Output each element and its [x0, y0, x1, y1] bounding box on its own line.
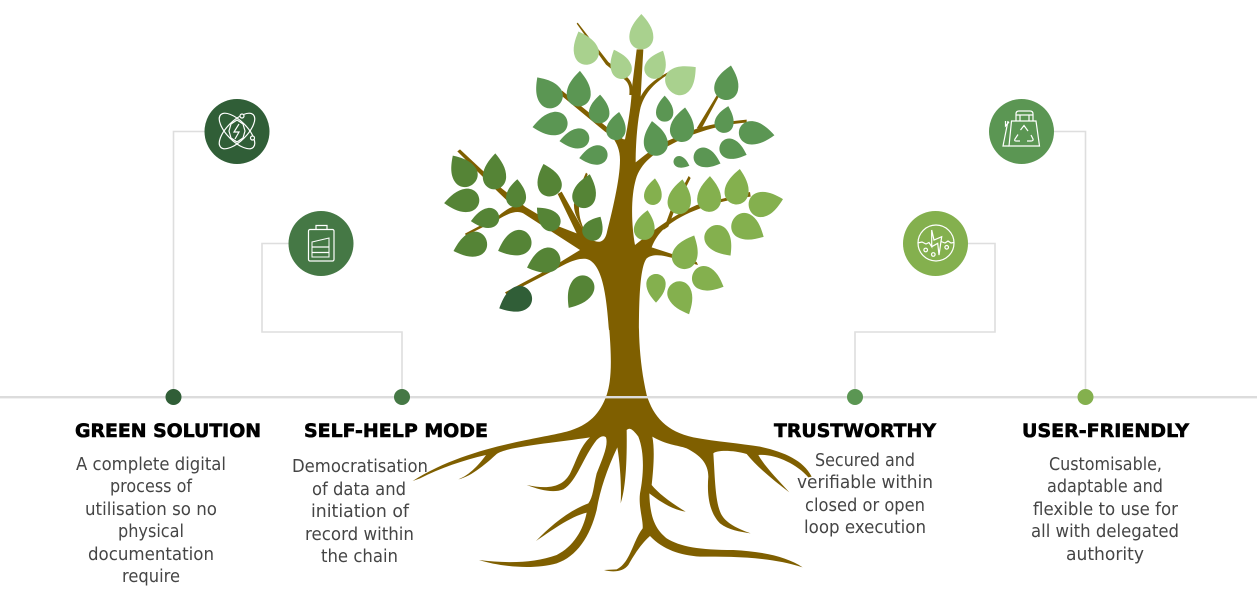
text block: user-friendly description: authority [1066, 544, 1144, 565]
text block: trustworthy description: closed or open [805, 495, 925, 516]
connector: user-friendly [1054, 132, 1086, 397]
panel: user-friendly text [1022, 421, 1190, 565]
text block: self-help mode description: record within [305, 524, 414, 545]
leaf: darkest green bottom leaf [494, 282, 536, 320]
heading: user-friendly: USER-FRIENDLY [1022, 421, 1190, 442]
text block: user-friendly description [1031, 454, 1179, 565]
text block: self-help mode description: initiation of [311, 501, 410, 522]
text block: user-friendly description: all with delegated [1031, 521, 1179, 542]
text block: trustworthy description [797, 450, 933, 538]
text block: trustworthy description: loop execution [804, 517, 926, 538]
panel: trustworthy text [774, 421, 937, 538]
connector: green solution [174, 132, 205, 397]
leaves: mid green upper cluster [527, 63, 776, 173]
heading: self-help mode: SELF-HELP MODE [304, 421, 488, 442]
text block: trustworthy description: verifiable within [797, 472, 933, 493]
text block: self-help mode description: of data and [312, 479, 406, 500]
icon: earth crack seismic [903, 211, 968, 276]
timeline dot: trustworthy [847, 389, 863, 405]
timeline dot: self-help mode [394, 389, 410, 405]
connector: trustworthy [855, 244, 995, 397]
tree roots [413, 330, 812, 571]
text block: green solution description: process of [110, 476, 193, 497]
panel: green solution text [75, 421, 261, 587]
leaves: pale green crown [567, 14, 705, 100]
timeline dot: green solution [166, 389, 182, 405]
text block: self-help mode description: the chain [321, 546, 398, 567]
text block: self-help mode description: Democratisation [292, 456, 428, 477]
heading: green solution: GREEN SOLUTION [75, 421, 261, 442]
connector: self-help mode [262, 244, 402, 397]
text block: user-friendly description: Customisable, [1049, 454, 1162, 475]
heading: trustworthy: TRUSTWORTHY [774, 421, 937, 442]
text block: trustworthy description: Secured and [815, 450, 915, 471]
text block: self-help mode description [292, 456, 428, 567]
panel: self-help mode text [292, 421, 488, 567]
text block: user-friendly description: flexible to use for [1033, 499, 1179, 520]
text block: green solution description: physical [118, 521, 184, 542]
text block: green solution description: utilisation so no [85, 499, 217, 520]
timeline dot: user-friendly [1078, 389, 1094, 405]
text block: green solution description: documentation [88, 544, 214, 565]
text block: green solution description [76, 454, 226, 587]
tree illustration [413, 14, 812, 571]
horizontal timeline rule [0, 396, 1257, 398]
icon: recycling shopping bag [989, 99, 1054, 164]
leaves: light green right cluster [632, 167, 786, 319]
leaves: dark green left cluster [442, 149, 609, 315]
tree trunk and branches [457, 23, 751, 330]
text block: user-friendly description: adaptable and [1047, 476, 1163, 497]
icon: atom with energy bolt [204, 99, 270, 164]
text block: green solution description: require [122, 566, 180, 587]
icon: clipboard battery [288, 211, 354, 276]
text block: green solution description: A complete digital [76, 454, 226, 475]
